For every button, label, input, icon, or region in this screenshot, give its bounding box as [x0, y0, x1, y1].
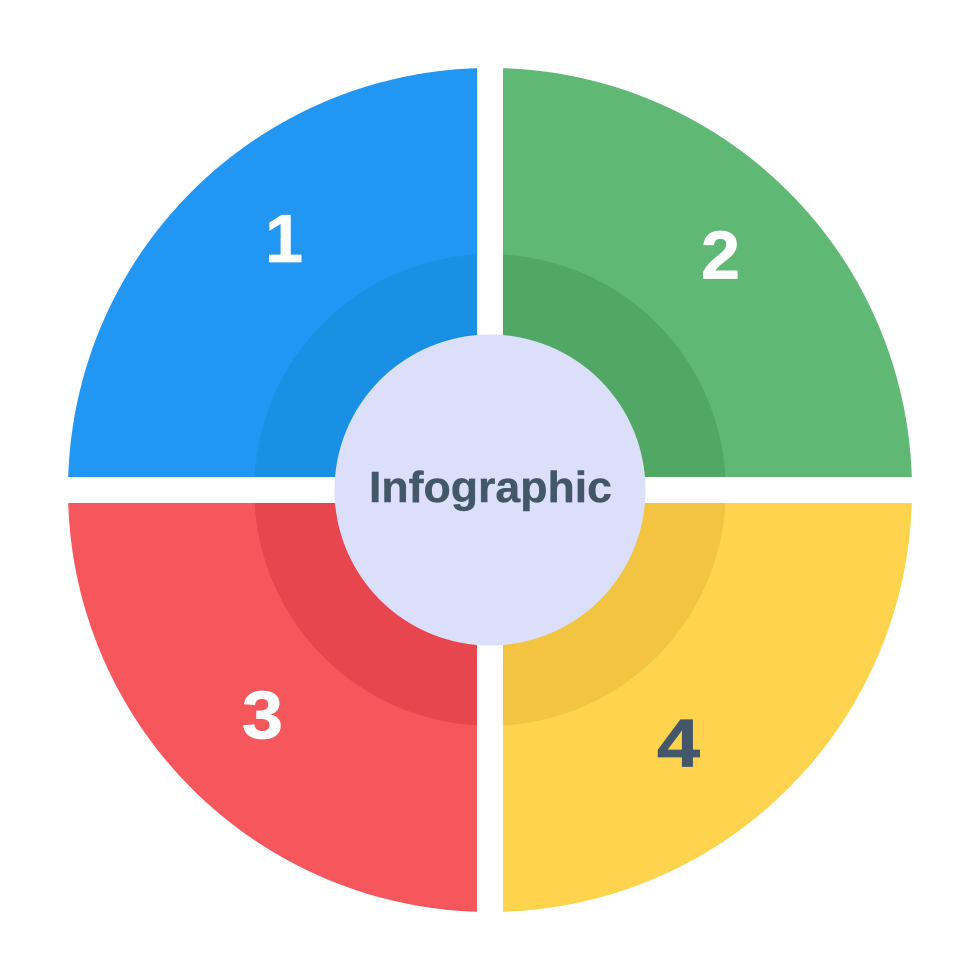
infographic wheel	[68, 68, 912, 912]
center label: Infographic	[369, 464, 612, 512]
segment 2: green	[503, 60, 920, 477]
segment 4: yellow	[503, 503, 920, 920]
segment 3: red	[60, 503, 477, 920]
center circle	[334, 334, 646, 646]
number 3: 3	[242, 677, 283, 753]
number 1: 1	[265, 201, 303, 277]
segment 1: blue	[60, 60, 477, 477]
number 2: 2	[701, 218, 740, 294]
number 4: 4	[657, 706, 700, 782]
